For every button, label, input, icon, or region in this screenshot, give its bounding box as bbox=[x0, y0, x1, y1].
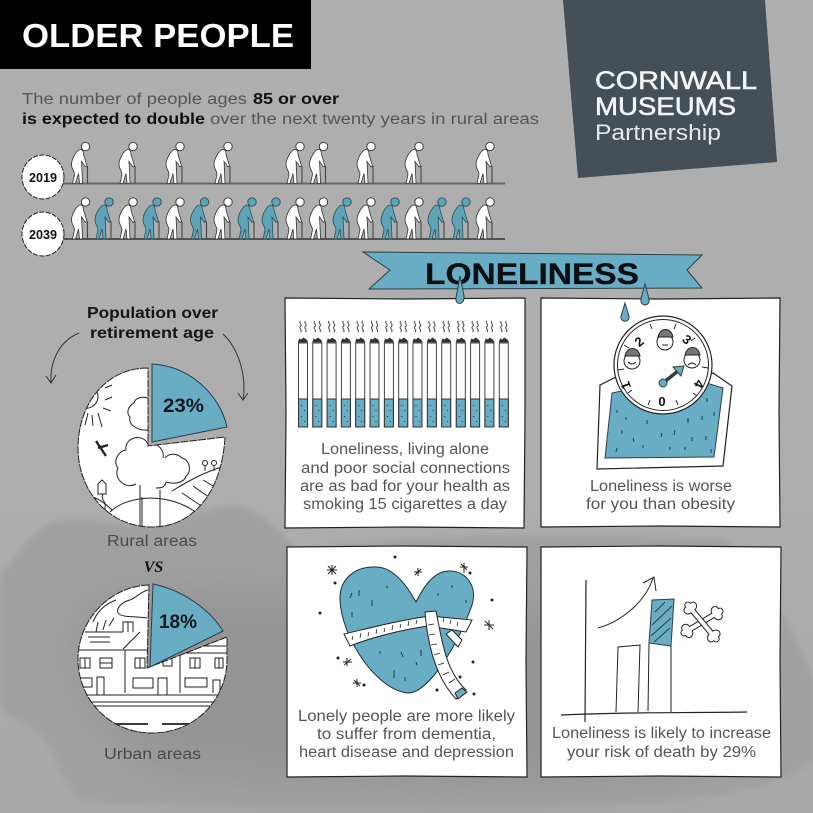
caption: cigarettes: and poor social connections bbox=[301, 460, 510, 477]
icon: row of 15 cigarettes bbox=[298, 321, 508, 427]
icon: bathroom scale: 4 bbox=[690, 377, 707, 391]
caption: heart bbox=[298, 708, 515, 761]
label: rural areas: Rural areas bbox=[107, 533, 197, 550]
intro text bbox=[22, 91, 539, 128]
panel: weighing scale bbox=[541, 298, 780, 527]
heading: population over retirement age bbox=[87, 305, 218, 342]
label: vs: VS bbox=[144, 559, 163, 576]
pictogram row: 2039: 2039 bbox=[29, 228, 57, 242]
icon: bathroom scale: 1 bbox=[617, 380, 634, 392]
heading: population over retirement age: retirement age bbox=[90, 325, 214, 342]
pie chart: urban areas 18% bbox=[78, 584, 227, 733]
caption: cigarettes: are as bad for your health as bbox=[300, 478, 510, 495]
intro text: The number of people ages bbox=[22, 91, 247, 108]
heading: population over retirement age: Population over bbox=[87, 305, 218, 322]
pictogram row: 2039 bbox=[22, 198, 505, 256]
icon: bathroom scale: 3 bbox=[679, 331, 694, 348]
icon: bathroom scale: 2 bbox=[632, 333, 647, 350]
pie chart: rural areas 23% bbox=[78, 364, 227, 527]
panel: heart bbox=[287, 546, 527, 777]
caption: heart: heart disease and depression bbox=[299, 744, 514, 761]
pie chart: rural areas 23%: 23% bbox=[163, 396, 204, 417]
icon: scattered stars and dots bbox=[319, 556, 494, 695]
caption: heart: to suffer from dementia, bbox=[317, 726, 496, 743]
banner: LONELINESS: LONELINESS bbox=[425, 258, 639, 291]
icon: heart with tape measure bbox=[319, 556, 494, 699]
caption: risk of death: Loneliness is likely to increase bbox=[552, 725, 771, 742]
title block: OLDER PEOPLE: OLDER PEOPLE bbox=[22, 17, 294, 54]
caption: obesity: Loneliness is worse bbox=[590, 478, 732, 495]
icon: bathroom scale: 0 bbox=[658, 394, 666, 409]
intro text: 85 or over bbox=[253, 91, 339, 108]
caption: obesity bbox=[586, 478, 735, 513]
pictogram row: 2019 bbox=[22, 142, 505, 199]
caption: cigarettes: smoking 15 cigarettes a day bbox=[303, 496, 507, 513]
caption: obesity: for you than obesity bbox=[586, 496, 735, 513]
intro text: is expected to double bbox=[22, 111, 205, 128]
caption: risk of death bbox=[552, 725, 771, 761]
panel: risk of death bbox=[541, 546, 781, 777]
icon: falling drop bbox=[621, 303, 629, 321]
caption: cigarettes: Loneliness, living alone bbox=[321, 441, 489, 458]
label: urban areas: Urban areas bbox=[104, 746, 201, 763]
banner: LONELINESS bbox=[363, 252, 702, 305]
icon: crossed bones bbox=[678, 598, 726, 646]
logo: Cornwall Museums Partnership: CORNWALL bbox=[595, 67, 757, 95]
caption: risk of death: your risk of death by 29% bbox=[567, 744, 756, 761]
caption: heart: Lonely people are more likely bbox=[298, 708, 515, 725]
caption: cigarettes bbox=[300, 441, 510, 513]
icon: bathroom scale bbox=[597, 316, 732, 469]
chart: rising bars with arrow bbox=[561, 577, 747, 722]
pie chart: urban areas 18%: 18% bbox=[159, 612, 197, 633]
logo: Cornwall Museums Partnership: Partnership bbox=[595, 120, 721, 145]
logo: Cornwall Museums Partnership bbox=[563, 0, 777, 178]
title block: OLDER PEOPLE bbox=[0, 0, 311, 69]
intro text: over the next twenty years in rural areas bbox=[210, 111, 539, 128]
logo: Cornwall Museums Partnership: MUSEUMS bbox=[595, 93, 736, 121]
arrow: left curve bbox=[46, 333, 79, 383]
arrow: right curve bbox=[223, 334, 248, 400]
pictogram row: 2019: 2019 bbox=[29, 171, 57, 185]
panel: cigarettes bbox=[285, 298, 525, 528]
